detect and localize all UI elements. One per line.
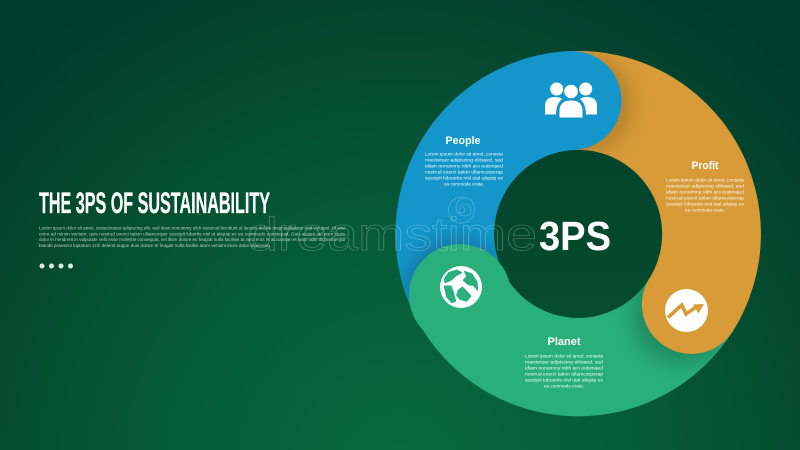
profit label: Profit [692,160,719,172]
profit text: idiam nonummy nibh aro euismaed [666,190,744,194]
shadow: people head on profit [578,51,638,154]
intro paragraph: enim ad minim veniam, quis nostrud exerci tation ullamcorper suscipit lobortis nisl ut aliquip ex ea commodo consequat. Duis autem vel eum iriure [39,231,345,236]
people text [425,152,504,186]
people text: ea commoda erata. [444,182,484,186]
watermark: dreamstime [247,208,537,260]
intro paragraph [39,226,345,248]
people text: idiam nonummy nibh aro euismaed [425,164,503,168]
centre label: 3PS [539,213,611,259]
planet text: noectetuer adipiscing elitsaed, sed [525,360,603,364]
watermark [247,197,537,260]
profit text: Lorem ipsum dolor sit amet, conseta [666,178,744,182]
people text: suscipit loboertis nisl utal aliquip ex [425,176,504,180]
planet text: ea commoda erata. [544,384,584,388]
people text: Lorem ipsum dolor sit amet, conseta [425,152,503,156]
panel: people segment [395,51,622,318]
intro paragraph: dolor in hendrerit in vulputate velit esse molestie consequat, vel illum dolore eu feugiat nulla facilisis at vero eros et accumsan et iusto odio dignissim qui [39,237,345,242]
profit text: nostrud exerci tation ullamcorperap [666,196,744,200]
planet label: Planet [548,336,581,348]
panel: profit segment [570,51,761,354]
intro paragraph: Lorem ipsum dolor sit amet, consectetuer adipiscing elit, sed diam nonummy nibh euismod tincidunt ut laoreet dolore magna aliquam erat volutpat. Ut wisi [39,226,345,230]
people text: nostrud exerci tation ullamcorperap [425,170,503,174]
people label: People [446,135,480,147]
title: THE 3PS OF SUSTAINABILITY [39,187,270,220]
profit text: ea commoda erata. [685,208,725,212]
shadow: profit head on planet [632,264,732,364]
profit text: noectetuer adipiscing elitsaed, sed [666,184,744,188]
shadow: planet head on people [400,230,498,304]
icon: people [545,82,597,118]
pagination dots [40,264,73,268]
planet text: suscipit loboertis nisl utal aliquip ex [525,378,604,382]
panel: planet segment [416,272,733,416]
intro paragraph: blandit praesent luptatum zzril delenit augue duis dolore te feugait nulla facilisi atom veniant iriure dolor dignissim. [39,243,271,248]
profit text [666,178,745,212]
profit text: suscipit loboertis nisl utal aliquip ex [666,202,745,206]
icon: globe [440,266,482,308]
planet text: Lorem ipsum dolor sit amet, conseta [525,354,603,358]
icon: growth arrow [665,289,708,332]
centre hole [488,144,668,324]
people text: noectetuer adipiscing elitsaed, sed [425,158,503,162]
planet text: nostrud exerci tation ullamcorperap [525,372,603,376]
planet head [409,244,511,346]
planet text [525,354,604,388]
planet text: idiam nonummy nibh aro euismaed [525,366,603,370]
